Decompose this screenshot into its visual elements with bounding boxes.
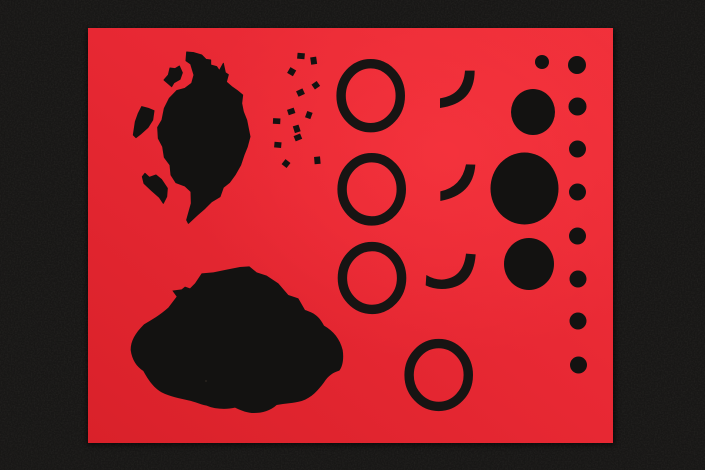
- arc segments: [426, 71, 476, 289]
- left fragment: [133, 107, 154, 138]
- panel: red paper: [88, 28, 613, 443]
- ring 3: [342, 247, 402, 309]
- ring 4: [409, 344, 468, 406]
- cut-outs: [131, 52, 587, 413]
- lower fragment: [142, 173, 167, 203]
- leaf-shaped cut-out with fragments: [133, 52, 250, 223]
- cloud-shaped cut-out: [131, 266, 343, 413]
- large and small circles: [490, 55, 558, 290]
- main leaf shape: [158, 52, 250, 223]
- ring 1: [341, 64, 400, 128]
- scattered paper squares: [273, 53, 321, 168]
- paper shadow: [87, 30, 615, 445]
- top fragment: [164, 66, 182, 87]
- ring 2: [342, 158, 401, 221]
- column of dots: [568, 56, 587, 374]
